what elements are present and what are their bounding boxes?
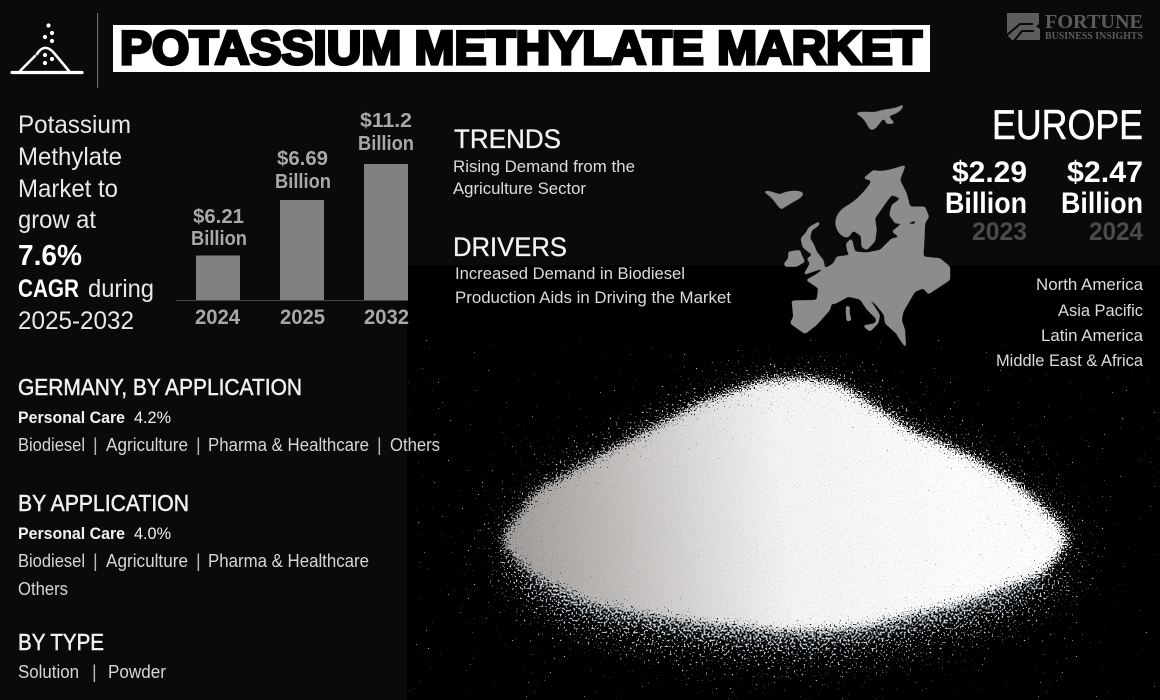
Europe 2024 value: $2.47: [1067, 156, 1143, 189]
text block: drivers: Increased Demand in Biodiesel: [455, 264, 685, 283]
segment: Germany by application: GERMANY, BY APPLICATION: [18, 374, 302, 400]
Europe 2023 value: 2023: [972, 218, 1027, 246]
bar 2025: Billion: [275, 171, 331, 193]
segment: Germany by application: Others: [390, 435, 440, 455]
segment: Germany by application: Agriculture: [106, 435, 188, 455]
Europe 2023 value: [945, 156, 1027, 246]
text block: other regions: Latin America: [1041, 326, 1144, 345]
bar 2032: [358, 110, 414, 329]
segment: Germany by application: Biodiesel: [18, 435, 85, 455]
segment: by application: [18, 490, 369, 599]
bar 2025: 2025: [280, 306, 325, 329]
bar 2024: 2024: [195, 306, 240, 329]
segment: Germany by application: [18, 374, 440, 455]
text block: other regions: North America: [1036, 275, 1144, 294]
segment: by application: |: [196, 551, 201, 571]
text block: drivers: Production Aids in Driving the Market: [455, 288, 731, 307]
text block: other regions: Asia Pacific: [1058, 301, 1143, 320]
bar 2024: [191, 206, 247, 329]
segment: Germany by application: |: [93, 435, 98, 455]
text block: market growth summary: grow at: [18, 206, 96, 234]
segment: by type: Powder: [108, 662, 166, 682]
segment: by application: Agriculture: [106, 551, 188, 571]
bar 2024: $6.21: [193, 206, 244, 228]
logo: Fortune Business Insights: FORTUNE: [1045, 11, 1143, 33]
header divider: [97, 13, 98, 88]
bar 2025: [275, 148, 331, 329]
Europe 2023 value: $2.29: [952, 156, 1027, 189]
bar 2032: $11.2: [360, 110, 412, 132]
segment: by application: Others: [18, 579, 68, 599]
segment: by application: |: [93, 551, 98, 571]
text block: drivers: [453, 232, 731, 307]
map: Europe: [763, 104, 950, 348]
logo: Fortune Business Insights: [1007, 11, 1143, 42]
text block: trends: [453, 124, 635, 198]
text block: market growth summary: 2025-2032: [18, 307, 134, 335]
Europe 2024 value: Billion: [1061, 187, 1143, 220]
bar 2032: Billion: [358, 133, 414, 155]
Europe 2024 value: [1061, 156, 1143, 246]
Europe 2024 value: 2024: [1089, 218, 1143, 246]
segment: by application: Biodiesel: [18, 551, 85, 571]
segment: by type: [18, 629, 166, 682]
bar 2024: Billion: [191, 228, 247, 250]
segment: Germany by application: 4.2%: [134, 409, 171, 427]
logo: Fortune Business Insights: BUSINESS INSIGHTS: [1045, 31, 1143, 42]
segment: by application: Personal Care: [18, 525, 125, 543]
text block: market growth summary: Market to: [18, 175, 118, 203]
text block: market growth summary: [18, 111, 154, 335]
text block: trends: Rising Demand from the: [453, 157, 635, 176]
icon: powder pile logo: [12, 23, 82, 72]
bar chart: market size: [176, 110, 414, 329]
segment: Germany by application: |: [377, 435, 382, 455]
text block: market growth summary: 7.6%: [18, 240, 82, 272]
segment: Germany by application: Pharma & Healthcare: [208, 435, 369, 455]
text block: trends: Agriculture Sector: [453, 179, 586, 198]
segment: Germany by application: |: [196, 435, 201, 455]
text block: market growth summary: CAGR: [18, 275, 79, 303]
text block: other regions: [996, 275, 1144, 370]
text block: trends: TRENDS: [454, 124, 561, 154]
title: POTASSIUM METHYLATE MARKET: [120, 21, 922, 74]
Europe 2023 value: Billion: [945, 187, 1027, 220]
segment: by application: BY APPLICATION: [18, 490, 189, 516]
segment: by type: Solution: [18, 662, 79, 682]
segment: by type: |: [92, 662, 97, 682]
text block: market growth summary: Potassium: [18, 111, 131, 139]
text block: other regions: Middle East & Africa: [996, 351, 1144, 370]
text block: drivers: DRIVERS: [453, 232, 567, 262]
text block: Europe values: [945, 101, 1143, 246]
text block: market growth summary: during: [88, 275, 154, 303]
bar 2025: $6.69: [277, 148, 328, 170]
photo: powder pile with scattered grains: [407, 340, 1160, 700]
segment: by application: Pharma & Healthcare: [208, 551, 369, 571]
segment: by type: BY TYPE: [18, 629, 104, 655]
segment: Germany by application: Personal Care: [18, 409, 125, 427]
text block: market growth summary: Methylate: [18, 143, 122, 171]
segment: by application: 4.0%: [134, 525, 171, 543]
bar 2032: 2032: [364, 306, 409, 329]
